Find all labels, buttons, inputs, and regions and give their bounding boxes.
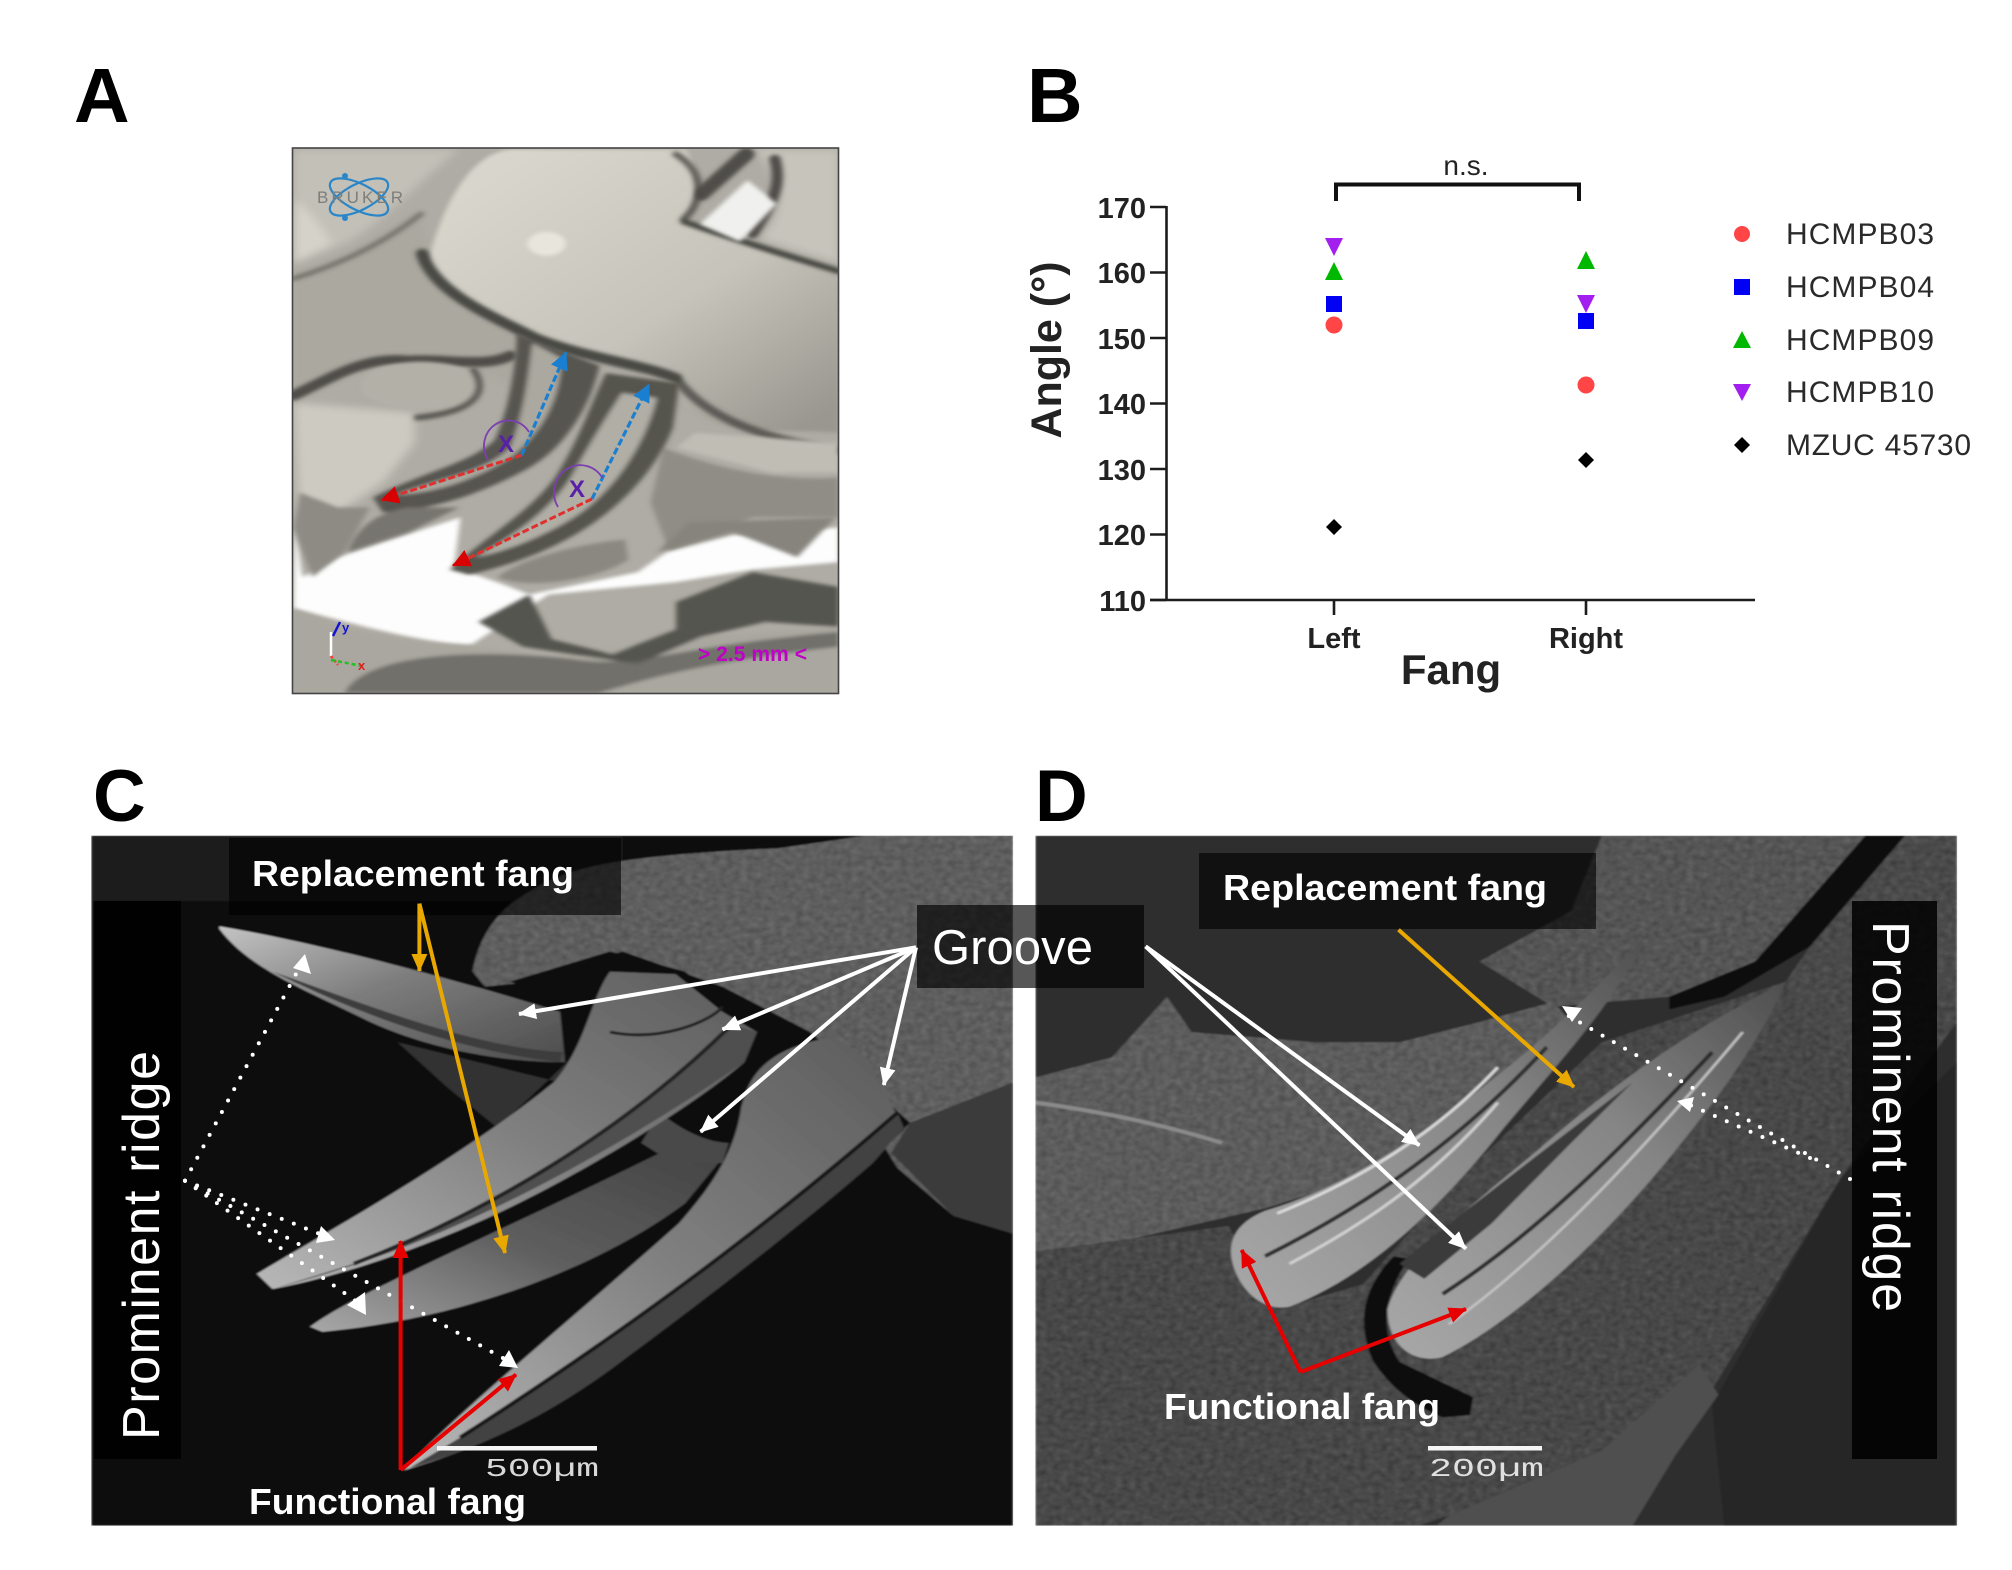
panel letter D: D [1035,756,1088,837]
icon: orientation axes: x [358,658,366,673]
icon: Bruker logo [317,171,403,223]
panel B: dot plot of fang angle [1023,150,1971,693]
label box: Replacement fang [1199,853,1596,929]
data points left [1325,238,1343,535]
x axis title: Fang [1401,646,1501,693]
legend: HCMPB03 [1786,218,1934,251]
y tick labels: 110 [1099,586,1146,618]
arrows: white groove pointers panel C [519,947,916,1132]
scale bar 200 µm [1428,1446,1544,1484]
scale bar 500 µm [437,1446,599,1484]
legend: HCMPB10 [1786,376,1934,409]
y axis with ticks [1150,206,1166,601]
panel letter A: A [74,53,130,139]
panel D: SEM image of right fangs [1035,836,1957,1526]
legend [1733,218,1971,462]
arrowheads: dotted lines [1562,1006,1694,1112]
arrows: yellow replacement fang [419,904,505,1253]
scale label 2.5 mm: > 2.5 mm < [698,643,807,666]
icon: orientation axes: y [342,620,350,635]
arrows: dotted prominent ridge pointers [185,961,510,1362]
panel letter C: C [93,756,146,837]
x tick label Left: Left [1307,623,1361,655]
angle label X right: X [569,476,585,503]
callout: Groove label shared by panels C and D [519,905,1466,1249]
angle label X left: X [498,431,514,458]
label: Functional fang: Functional fang [1164,1386,1440,1427]
panel A: 3D micro-CT render of fangs [292,148,839,694]
legend: HCMPB04 [1786,271,1934,304]
arrows: red functional fang [401,1241,516,1470]
x tick label Right: Right [1549,623,1623,655]
icon: Bruker logo: BRUKER [317,188,403,207]
arrowheads: dotted lines [293,954,518,1368]
y tick labels [1098,193,1146,618]
arrows: red functional fang [1242,1250,1466,1372]
SEM micrograph C [91,836,1013,1526]
y tick labels: 140 [1098,389,1146,421]
label box with Prominent ridge text [94,901,181,1459]
label box with Prominent ridge text: Prominent ridge [1861,921,1919,1312]
arrows: white groove pointers panel D [1146,946,1466,1249]
significance bracket [1336,184,1579,201]
n.s. label: n.s. [1443,150,1489,181]
y tick labels: 150 [1098,324,1146,356]
x axis with ticks [1150,600,1755,615]
y tick labels: 120 [1098,520,1146,552]
panel letter B: B [1027,53,1083,139]
label: Functional fang: Functional fang [249,1481,526,1522]
label box with Prominent ridge text: Prominent ridge [113,1051,171,1440]
SEM micrograph D [1035,836,1957,1526]
label text: Groove [932,921,1093,975]
data points right [1577,251,1595,468]
scale bar 500 µm: 500µm [485,1454,599,1484]
angle lines: dashed measurement arrows [382,352,649,566]
panel C: SEM image of left fangs [91,836,1013,1526]
legend: MZUC 45730 [1786,429,1971,462]
y tick labels: 170 [1098,193,1146,225]
label box [917,905,1144,988]
y axis title: Angle (°) [1023,261,1071,439]
label: Replacement fang: Replacement fang [252,853,574,894]
label box with Prominent ridge text [1852,901,1937,1459]
scale bar 200 µm: 200µm [1429,1454,1544,1484]
y tick labels: 160 [1098,258,1146,290]
label box: Replacement fang [229,838,621,915]
legend: HCMPB09 [1786,324,1934,357]
icon: orientation axes [331,620,366,673]
y tick labels: 130 [1098,455,1146,487]
arrow: yellow replacement fang [1398,930,1574,1087]
label: Replacement fang: Replacement fang [1223,867,1547,908]
arrows: dotted prominent ridge pointers [1562,1012,1850,1179]
